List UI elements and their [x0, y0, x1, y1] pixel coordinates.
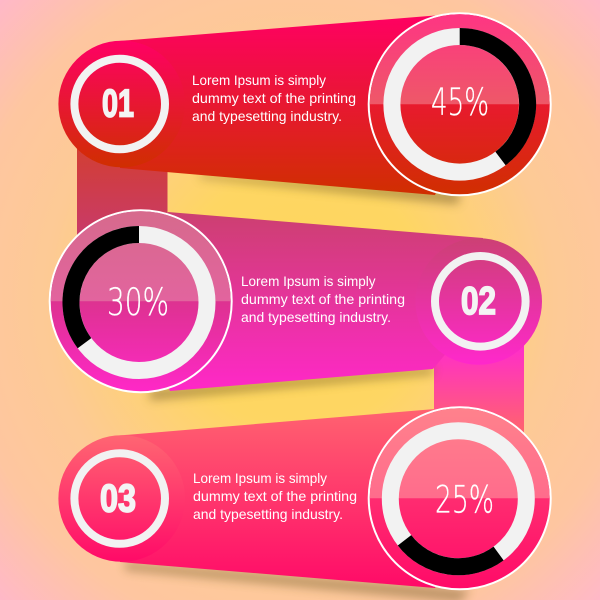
donut 30%: 30%	[107, 281, 169, 324]
donut 45%	[369, 13, 551, 195]
description 2: dummy text of the printing	[241, 292, 405, 307]
shadow: band 2	[150, 367, 433, 400]
number badge 03: 03	[100, 478, 136, 520]
band 3	[113, 409, 470, 588]
number badge 01: 01	[102, 82, 134, 126]
donut 45%: 45%	[431, 81, 489, 124]
description 1: dummy text of the printing	[192, 91, 356, 106]
number badge 03	[58, 435, 185, 562]
shadow: band 3	[125, 562, 470, 600]
connector: step 1 to step 2	[77, 140, 168, 245]
band 2	[120, 212, 490, 391]
description 3: and typesetting industry.	[193, 507, 343, 522]
number badge 02	[415, 238, 542, 365]
description 2: Lorem Ipsum is simply	[241, 274, 376, 289]
description 3: Lorem Ipsum is simply	[193, 471, 327, 486]
donut 30%	[50, 210, 232, 392]
description 3: dummy text of the printing	[193, 489, 357, 504]
panel: step 1	[58, 13, 551, 195]
donut 25%: 25%	[435, 478, 494, 522]
number badge 02: 02	[461, 280, 496, 323]
description 1: Lorem Ipsum is simply	[192, 73, 326, 88]
panel: step 2	[50, 210, 542, 392]
number badge 01	[58, 41, 185, 167]
description 2: and typesetting industry.	[241, 310, 391, 325]
donut 25%	[369, 407, 551, 589]
connector: step 2 to step 3	[434, 340, 524, 435]
panel: step 3	[58, 407, 551, 589]
shadow: band 1	[200, 174, 460, 204]
description 1: and typesetting industry.	[192, 109, 342, 124]
band 1	[113, 16, 470, 195]
